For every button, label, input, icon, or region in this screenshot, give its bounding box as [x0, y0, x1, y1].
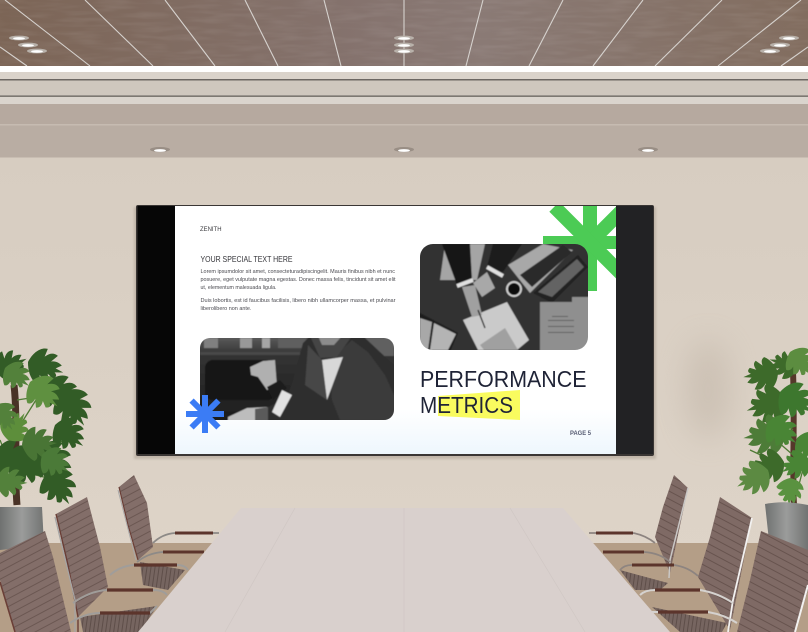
- far right chair: [589, 475, 698, 590]
- wall: [0, 157, 808, 632]
- body paragraph 2: [200, 298, 396, 312]
- title: [420, 366, 586, 418]
- ceiling lights: left: [9, 36, 47, 53]
- ceiling lights: right: [760, 36, 799, 53]
- near left chair: [0, 531, 71, 632]
- right plant: [729, 341, 808, 506]
- ceiling lights: centre: [394, 36, 414, 53]
- slide: [175, 206, 616, 454]
- blue asterisk: [186, 395, 224, 433]
- body paragraph 1: ut, elementum malesuada ligula.: [200, 285, 276, 291]
- subheading: YOUR SPECIAL TEXT HERE: [200, 255, 292, 264]
- photo: man in suit checking watch: [198, 336, 396, 422]
- far left chair: [118, 475, 219, 590]
- photo: business desk from above: [418, 242, 590, 352]
- body paragraph 2: liberolibero non ante.: [200, 306, 252, 312]
- body paragraph 1: Lorem ipsumdolor sit amet, consecteturadipiscingelit. Mauris finibus nibh et nunc: [200, 269, 395, 275]
- wooden ceiling: [0, 0, 808, 66]
- title: PERFORMANCE: [420, 366, 586, 392]
- middle right chair: [640, 497, 752, 632]
- right plant pot: [765, 502, 808, 550]
- left plant pot: [0, 507, 44, 550]
- conference table: [138, 508, 670, 632]
- title: METRICS: [420, 392, 513, 418]
- near right chair: [737, 531, 808, 632]
- body paragraph 1: posuere, eget vulputate magna egestas. Donec massa felis, tincidunt sit amet elit: [200, 277, 396, 283]
- middle left chair: [55, 497, 188, 632]
- title highlight: [438, 390, 520, 420]
- body paragraph 1: [200, 269, 396, 291]
- left plant: [0, 343, 101, 514]
- brand name: ZENITH: [200, 226, 222, 233]
- recessed spotlights: [150, 147, 658, 152]
- left black bar: [138, 206, 175, 454]
- wall shadow of right plant: [686, 340, 730, 440]
- ceiling bulkhead bands: [0, 66, 808, 158]
- body paragraph 2: Duis lobortis, est id faucibus facilisis, libero nibh ullamcorper massa, et pulvinar: [200, 298, 396, 304]
- page number: PAGE 5: [570, 431, 592, 437]
- green asterisk: [543, 206, 616, 291]
- right dark bar: [616, 206, 653, 454]
- wall-mounted screen: [134, 190, 656, 459]
- floor: [0, 543, 808, 632]
